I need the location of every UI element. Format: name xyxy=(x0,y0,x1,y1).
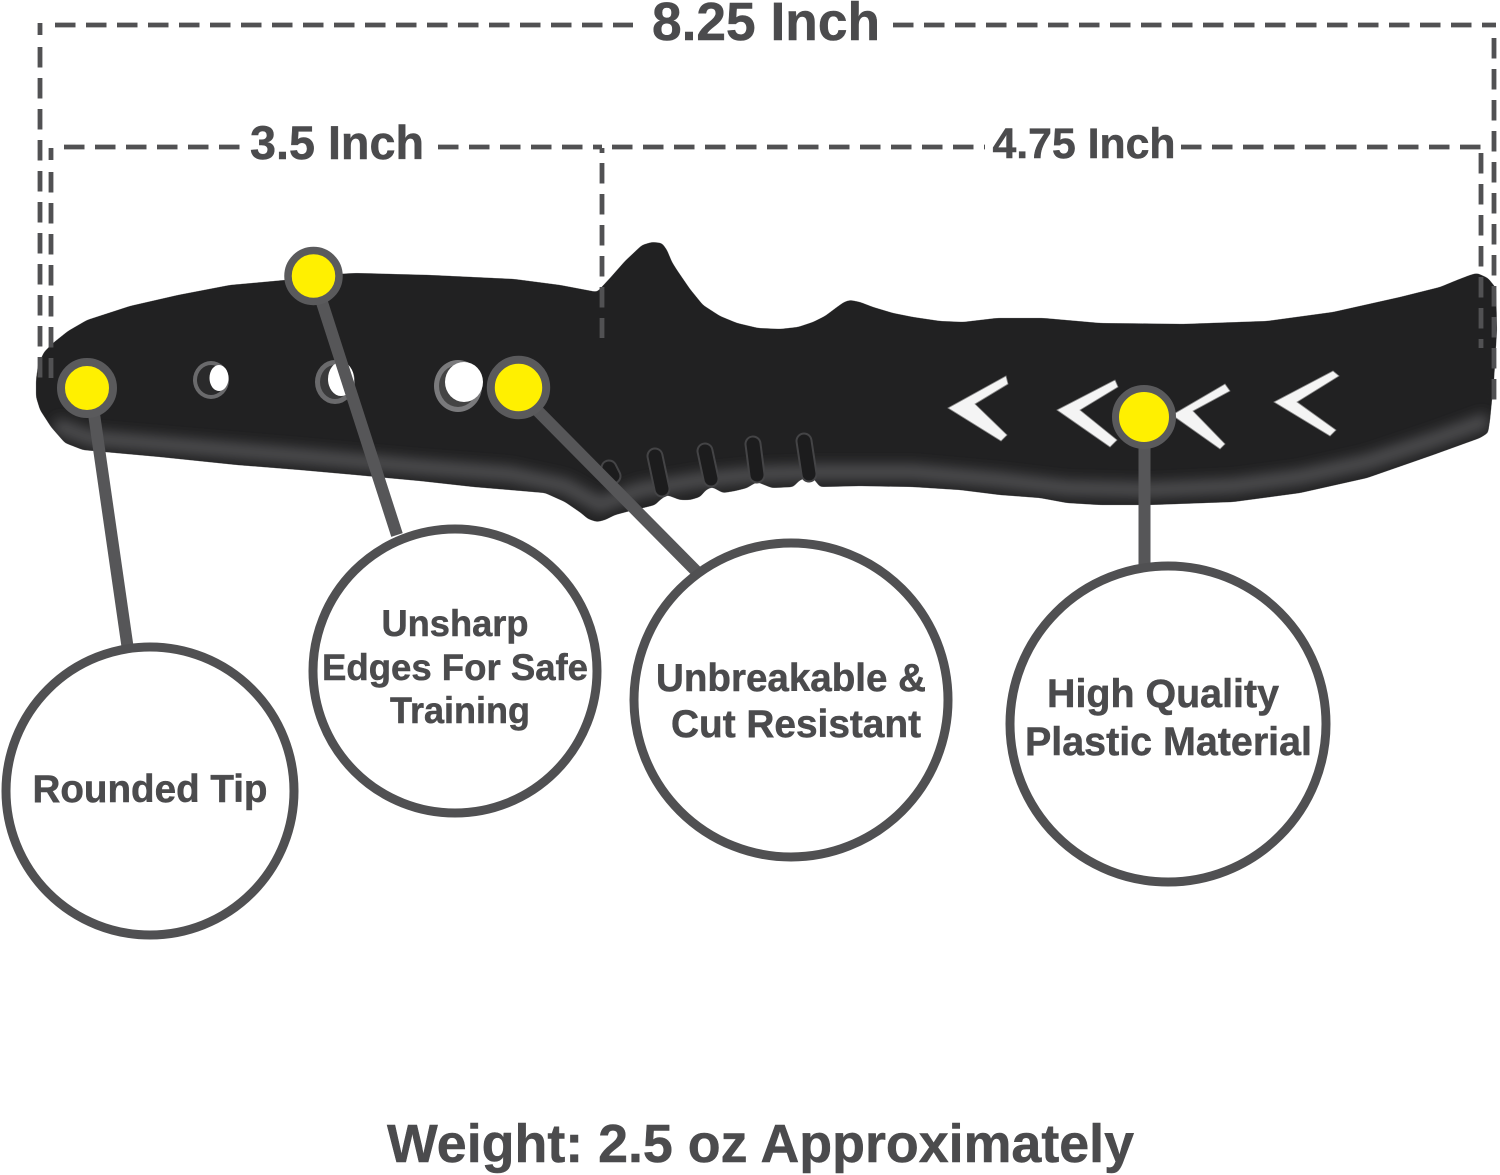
weight caption: Weight: 2.5 oz Approximately xyxy=(387,1114,1134,1174)
callout: rounded tip xyxy=(6,362,294,935)
dimension: 4.75 inch blade: 4.75 Inch xyxy=(992,120,1176,168)
callout: plastic material xyxy=(1010,388,1326,882)
lower edge highlight xyxy=(55,420,1488,505)
training knife silhouette xyxy=(36,242,1497,522)
callout: plastic material: Plastic Material xyxy=(1025,720,1312,764)
callout: unsharp edges: Unsharp xyxy=(382,603,528,644)
serration grooves xyxy=(609,441,809,489)
callout: unbreakable: Unbreakable & xyxy=(656,657,926,700)
callout: unbreakable xyxy=(491,360,948,857)
callout: rounded tip: Rounded Tip xyxy=(32,768,268,811)
handle holes xyxy=(193,360,483,412)
callout: unsharp edges: Edges For Safe xyxy=(322,647,588,688)
callout: unbreakable: Cut Resistant xyxy=(671,703,921,746)
blade chevron cuts xyxy=(948,371,1339,449)
callout: plastic material: High Quality xyxy=(1047,672,1279,716)
callout: unsharp edges xyxy=(288,250,597,813)
callout: unsharp edges: Training xyxy=(390,690,530,731)
dimension: 3.5 inch handle: 3.5 Inch xyxy=(250,116,424,169)
